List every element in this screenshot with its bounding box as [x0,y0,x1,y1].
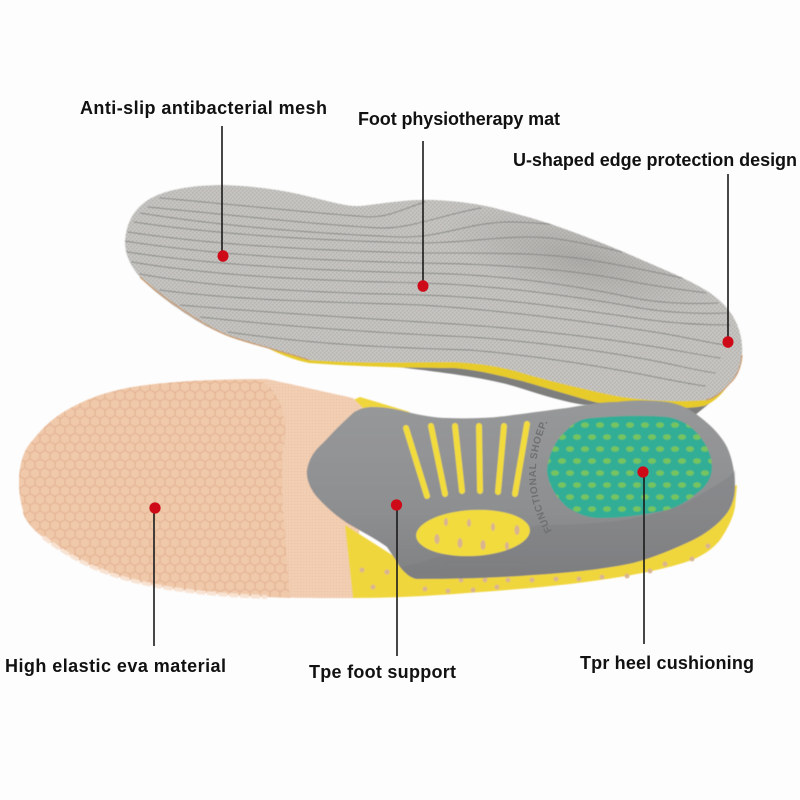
callout: eva material [5,502,226,676]
yellow edge of top insole [262,340,732,409]
callout: anti-slip mesh: Anti-slip antibacterial mesh [80,98,327,118]
callout: U-shaped edge [513,150,797,348]
arch shading and stripes [125,180,730,386]
grey underside of top insole [397,360,716,416]
top insole: grey antibacterial mesh upper [125,180,742,416]
brown edge [140,277,742,400]
infographic: insole feature diagram [6,100,796,682]
callout: eva material: High elastic eva material [5,656,226,676]
callout: TPE support [309,499,456,682]
yellow perforated side [345,485,737,598]
side perforations [360,544,710,593]
embossed text on support [529,422,552,534]
callout: U-shaped edge: U-shaped edge protection design [513,150,797,170]
callout: TPR heel [580,466,754,673]
yellow oval window [415,507,531,559]
bottom insole [18,378,738,600]
moulded groove [445,562,527,569]
callout: TPE support: Tpe foot support [309,662,456,682]
arch slots [406,424,527,496]
embossed text on support: FUNCTIONAL SHOEP.D [529,422,552,534]
mesh surface [125,185,742,401]
callout: physiotherapy mat [358,109,560,292]
grey lower wall shading [400,470,735,579]
honeycomb texture [18,380,290,598]
callout: anti-slip mesh [80,98,327,262]
callout: TPR heel: Tpr heel cushioning [580,653,754,673]
green TPR heel gel [547,416,712,518]
pink forefoot pad [19,379,365,598]
yellow top tab [353,397,410,425]
callout: physiotherapy mat: Foot physiotherapy mat [358,109,560,129]
light rim of forefoot [43,537,267,597]
grey TPE support [307,400,735,579]
